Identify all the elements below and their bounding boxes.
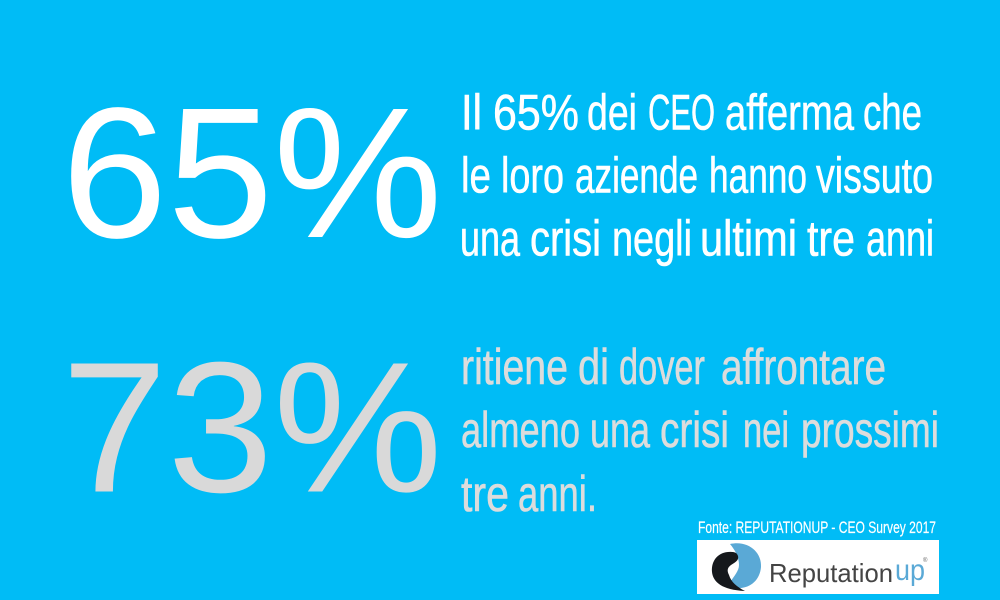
text block: 73% description: una (590, 402, 650, 458)
text block: 65% description: negli (612, 210, 692, 266)
text block: 73% description: di (578, 339, 609, 395)
logo wordmark: up: up (895, 554, 925, 587)
text block: 65% description: tre (807, 210, 855, 266)
text block: 73% description: almeno (461, 402, 580, 458)
text block: 65% description: che (863, 84, 922, 140)
text block: 73% description: nei (743, 402, 789, 458)
statistic: 73%: 73% (62, 324, 442, 532)
text block: 73% description: prossimi (801, 402, 939, 458)
text block: 65% description: anni (866, 210, 934, 266)
text block: 65% description: vissuto (816, 148, 933, 204)
text block: 65% description: CEO (648, 84, 715, 140)
text block: 73% description: affrontare (721, 339, 886, 395)
text block: 65% description: loro (501, 148, 564, 204)
logo: ReputationUP (697, 540, 939, 594)
text block: 73% description (461, 339, 939, 522)
statistic: 65%: 65% (62, 70, 442, 277)
text block: 65% description: hanno (709, 148, 807, 204)
registered mark: ® (923, 557, 928, 564)
text block: 65% description: dei (587, 84, 637, 140)
text block: 65% description: aziende (575, 148, 698, 204)
text block: 73% description: tre (461, 466, 509, 522)
text block: 73% description: ritiene (461, 339, 568, 395)
text block: 65% description: Il (461, 84, 482, 140)
text block: 65% description (460, 84, 934, 266)
text block: 73% description: dover (619, 339, 705, 395)
text block: 73% description: anni. (518, 466, 597, 522)
text block: 73% description: crisi (660, 402, 729, 458)
text block: 65% description: ultimi (700, 210, 797, 266)
text block: 65% description: una (460, 210, 520, 266)
icon: black crescent (712, 552, 745, 591)
text block: 65% description: afferma (725, 84, 854, 140)
text block: 65% description: crisi (530, 210, 601, 266)
icon: blue crescent (730, 543, 761, 588)
text block: 65% description: 65% (493, 84, 579, 140)
logo wordmark: Reputation (769, 558, 893, 588)
text block: 65% description: le (461, 148, 491, 204)
